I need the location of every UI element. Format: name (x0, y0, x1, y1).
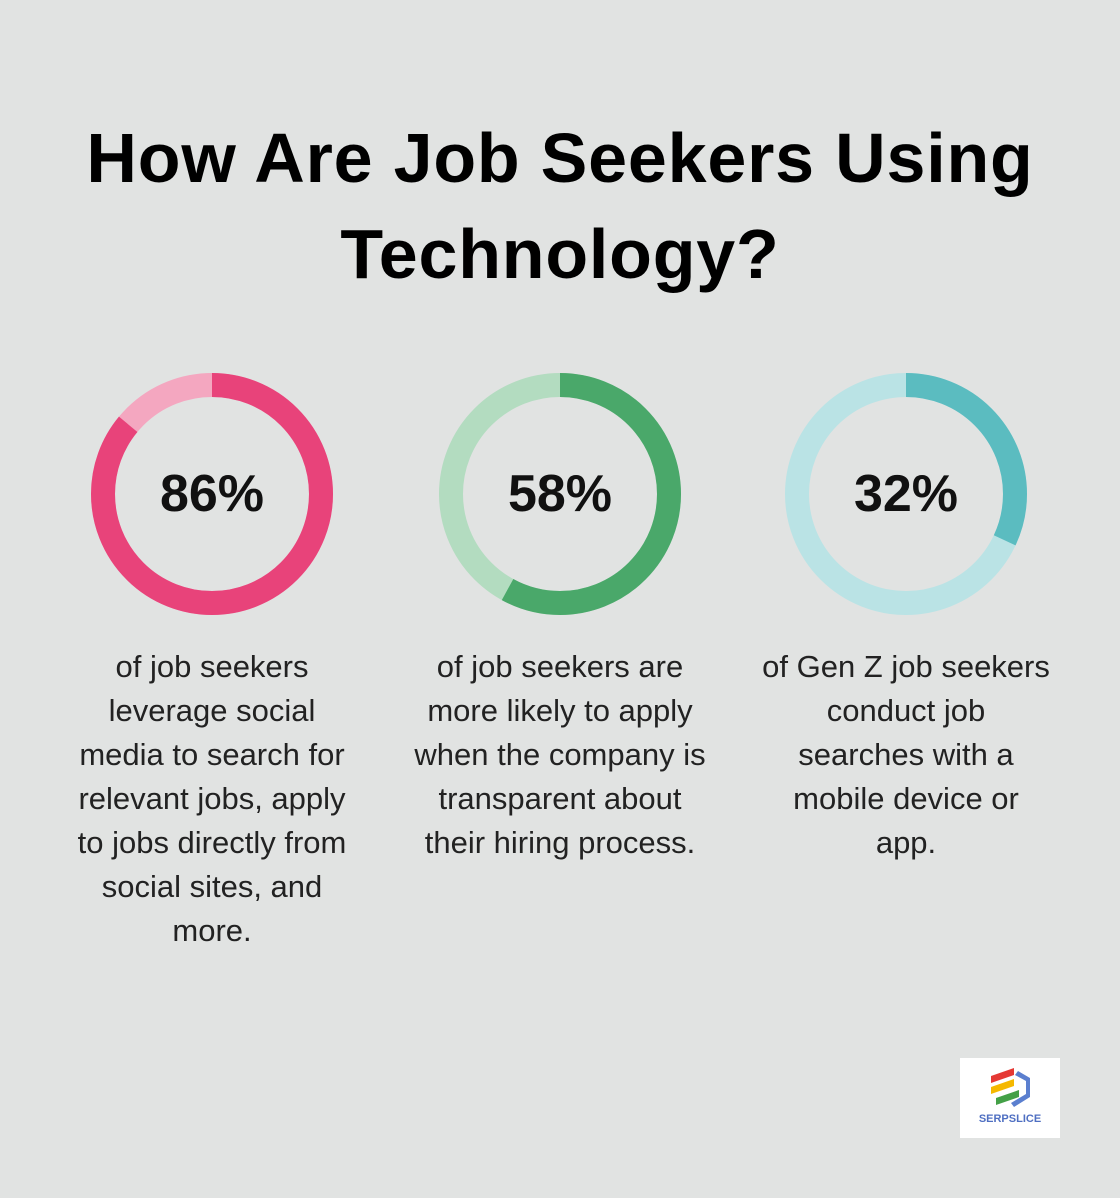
donut: 58% (439, 373, 681, 615)
text: stat 1: of job seekers (116, 649, 308, 684)
text: stat 2: when the company is (414, 737, 706, 772)
donut: 58%: 58% (508, 465, 612, 523)
text: stat 2: their hiring process. (425, 825, 695, 860)
text: stat 2: of job seekers are (437, 649, 683, 684)
text: stat 1: more. (172, 913, 252, 948)
text: stat 1: social sites, and (102, 869, 322, 904)
title (86, 119, 1034, 293)
text: stat 2: more likely to apply (427, 693, 693, 728)
text: stat 1: to jobs directly from (78, 825, 346, 860)
donut: 86% (91, 373, 333, 615)
donut: 32% (785, 373, 1027, 615)
logo: serpslice: SERPSLICE (979, 1113, 1041, 1125)
text: stat 1 (78, 649, 346, 948)
text: stat 2: transparent about (438, 781, 682, 816)
text: stat 3 (762, 649, 1050, 860)
text: stat 3: app. (876, 825, 936, 860)
text: stat 2 (414, 649, 706, 860)
text: stat 1: media to search for (79, 737, 345, 772)
text: stat 3: conduct job (827, 693, 985, 728)
title: How Are Job Seekers Using (86, 119, 1034, 197)
text: stat 3: of Gen Z job seekers (762, 649, 1050, 684)
text: stat 3: mobile device or (793, 781, 1019, 816)
donut: 86%: 86% (160, 465, 264, 523)
donut: 32%: 32% (854, 465, 958, 523)
text: stat 1: leverage social (109, 693, 315, 728)
logo: serpslice (960, 1058, 1060, 1138)
title: Technology? (340, 215, 780, 293)
text: stat 3: searches with a (798, 737, 1014, 772)
text: stat 1: relevant jobs, apply (78, 781, 346, 816)
